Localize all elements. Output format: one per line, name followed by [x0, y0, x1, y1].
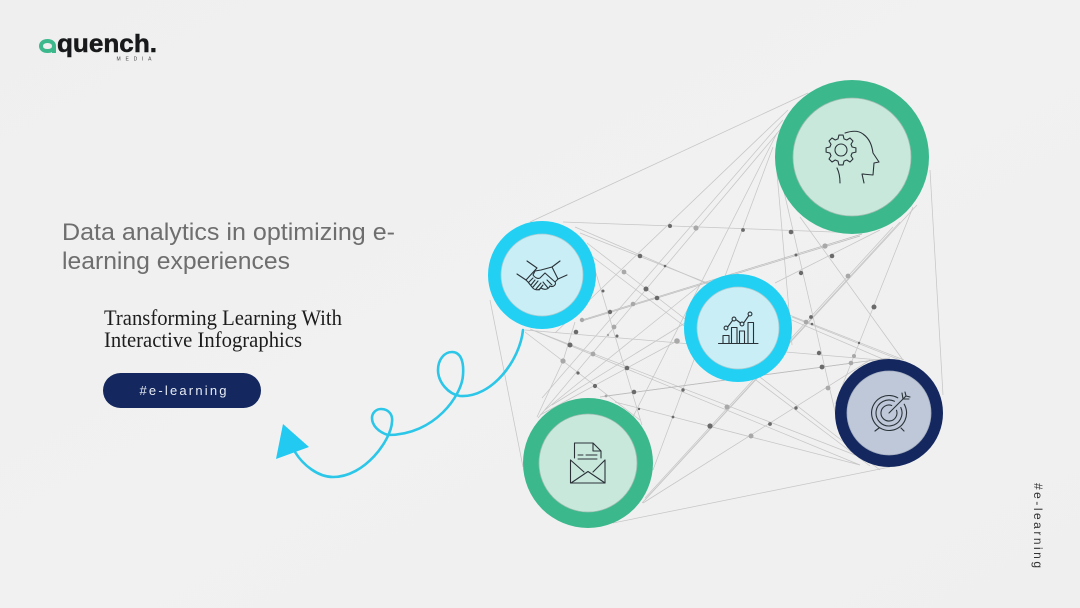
node: brain and gear [775, 80, 929, 234]
subheading: transforming learning: Transforming Learning With [104, 305, 342, 330]
icon: target with arrow [872, 392, 910, 431]
logo subtitle: MEDIA [116, 56, 152, 62]
subheading: transforming learning [104, 305, 342, 352]
heading: data analytics [62, 219, 395, 275]
logo wordmark: quench. [57, 30, 157, 58]
vertical hashtag: #e-learning [1031, 483, 1045, 568]
node: bar chart [684, 274, 792, 382]
icon: handshake [517, 261, 567, 290]
icon: envelope with letter [570, 443, 605, 483]
network nodes [560, 224, 876, 438]
subheading: transforming learning: Interactive Infographics [104, 327, 302, 352]
node: target [835, 359, 943, 467]
hashtag button [103, 373, 261, 408]
heading: data analytics: learning experiences [62, 248, 290, 275]
node: envelope [523, 398, 653, 528]
curly arrow [276, 330, 523, 477]
icon: head with gear [826, 131, 879, 183]
network lines [490, 93, 943, 523]
logo mark [41, 41, 54, 53]
logo: quench media [41, 30, 157, 62]
arrow head [276, 424, 309, 459]
node: handshake [488, 221, 596, 329]
icon: bar chart [718, 312, 758, 344]
hashtag button: #e-learning [140, 383, 226, 398]
heading: data analytics: Data analytics in optimizing e- [62, 219, 395, 246]
